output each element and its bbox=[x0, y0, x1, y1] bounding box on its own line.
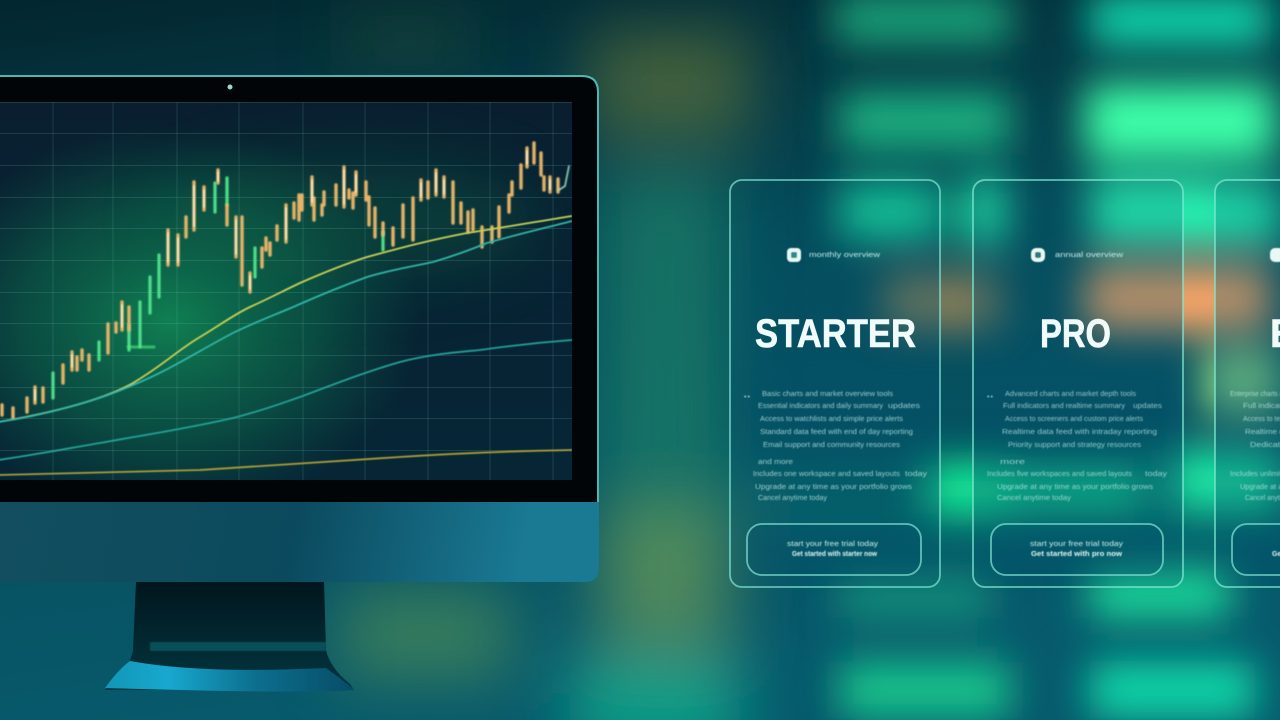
feature list: Standard data feed with end of day reporting bbox=[760, 429, 913, 436]
grid bbox=[0, 102, 572, 480]
feature list bbox=[1230, 391, 1280, 502]
feature list: •• bbox=[744, 394, 751, 401]
plan name: PRO bbox=[1040, 312, 1111, 356]
card label: monthly overview bbox=[809, 252, 881, 259]
feature list: Email support and community resources bbox=[763, 442, 901, 449]
card panel bbox=[730, 180, 940, 587]
feature list: Priority support and strategy resources bbox=[1008, 442, 1142, 449]
feature list: Upgrade at any time as your portfolio grows bbox=[997, 484, 1154, 491]
plan name: STARTER bbox=[755, 312, 916, 356]
call to action button bbox=[747, 524, 921, 575]
card icon bbox=[787, 248, 801, 262]
card label: annual overview bbox=[1055, 252, 1124, 259]
pricing card: enterprise, cropped bbox=[1215, 180, 1280, 587]
feature list: Advanced charts and market depth tools bbox=[1005, 391, 1137, 398]
call to action button bbox=[991, 524, 1163, 575]
monitor bbox=[0, 75, 599, 692]
green candles bbox=[53, 178, 383, 398]
bezel rim bbox=[0, 76, 598, 502]
card icon bbox=[1270, 248, 1280, 262]
pricing card: starter bbox=[730, 180, 940, 587]
feature list: Cancel anytime today bbox=[997, 495, 1072, 502]
call to action button: start your free trial today bbox=[787, 541, 879, 548]
feature list: more bbox=[1000, 459, 1025, 466]
card panel bbox=[1215, 180, 1280, 587]
feature list: updates bbox=[888, 403, 921, 410]
pricing card: pro bbox=[973, 180, 1183, 587]
feature list: updates bbox=[1133, 403, 1163, 410]
feature list: Essential indicators and daily summary bbox=[758, 403, 884, 410]
feature list: and more bbox=[758, 459, 793, 466]
call to action button: start your free trial today bbox=[1030, 541, 1124, 548]
feature list: •• bbox=[987, 394, 994, 401]
feature list bbox=[987, 391, 1168, 502]
call to action button: Get started with starter now bbox=[792, 551, 878, 558]
call to action button bbox=[1232, 524, 1280, 575]
feature list: Cancel anytime today bbox=[758, 495, 827, 502]
monitor bezel bbox=[0, 77, 597, 502]
monitor stand bbox=[105, 582, 355, 692]
call to action button: Get started with pro now bbox=[1031, 551, 1123, 558]
feature list bbox=[744, 391, 928, 502]
feature list: today bbox=[1145, 471, 1168, 478]
camera dot bbox=[228, 84, 232, 90]
monitor body bbox=[0, 75, 599, 582]
feature list: Includes one workspace and saved layouts bbox=[753, 471, 901, 478]
card icon bbox=[1031, 248, 1045, 262]
chart screen bbox=[0, 102, 572, 515]
feature list: Basic charts and market overview tools bbox=[762, 391, 894, 398]
card panel bbox=[973, 180, 1183, 587]
orange candles bbox=[2, 143, 569, 418]
feature list: Realtime data feed with intraday reporting bbox=[1002, 429, 1157, 436]
feature list: Access to watchlists and simple price alerts bbox=[760, 416, 904, 423]
feature list: Upgrade at any time as your portfolio grows bbox=[755, 484, 913, 491]
feature list: Access to screeners and custom price alerts bbox=[1005, 416, 1143, 423]
feature list: today bbox=[905, 471, 928, 478]
moving average lines bbox=[0, 216, 572, 475]
feature list: Full indicators and realtime summary bbox=[1003, 403, 1126, 410]
feature list: Includes five workspaces and saved layouts bbox=[987, 471, 1133, 478]
